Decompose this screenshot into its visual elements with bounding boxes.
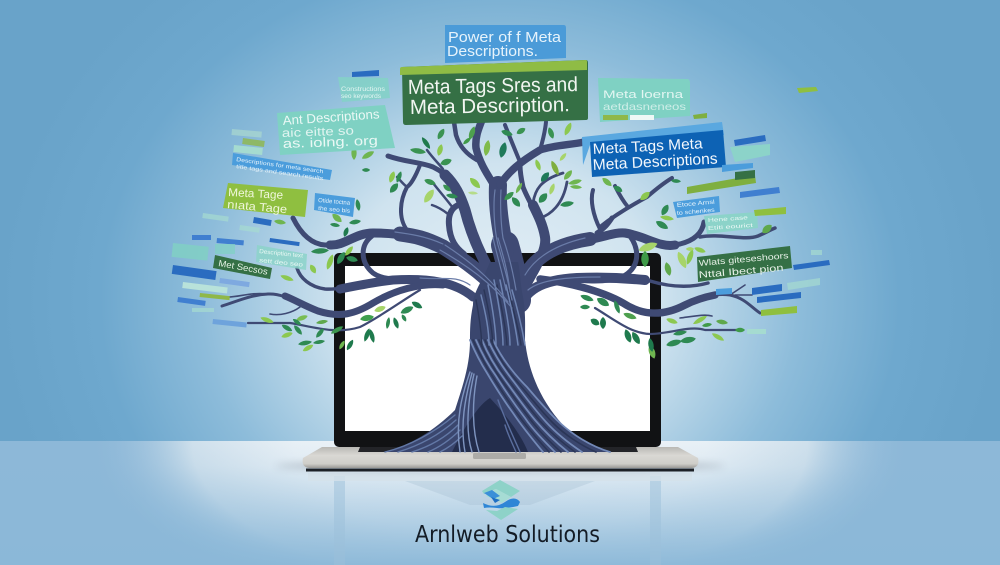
label: teal card right: Etiti eourict	[708, 223, 754, 232]
label: small blue card left: Otide toctna	[318, 198, 351, 207]
label: dark green right card	[697, 246, 792, 282]
right branches	[517, 165, 775, 334]
laptop base	[303, 447, 698, 472]
label: teal left card: as. iolng. org	[283, 133, 378, 151]
left upper limb	[388, 156, 490, 272]
label: blue strip left	[232, 153, 332, 182]
left middle leaf cluster	[274, 146, 403, 283]
label: teal card left middle: Description text	[259, 249, 304, 260]
label: Power of Meta Descriptions: Descriptions.	[447, 43, 538, 60]
right middle leaf cluster	[601, 176, 774, 277]
left branches	[222, 150, 517, 330]
label: Power of Meta Descriptions: Power of f Meta	[448, 29, 562, 46]
label: Meta Tags lime card	[223, 183, 308, 217]
label: Meta Tags and Meta Description: Meta Tags Sres and	[408, 73, 578, 99]
label: Meta Sections dark green: Met Secsos	[218, 258, 269, 277]
label: dark green right card: Wlats giteseshoors	[698, 250, 789, 268]
label: Meta Tags Meta Descriptions	[582, 122, 726, 177]
label: Meta Sections dark green	[213, 255, 272, 279]
right upper limb	[520, 165, 545, 300]
label: Meta Tags lime card: nıata Tage	[227, 199, 288, 216]
upper canopy leaves	[410, 122, 582, 209]
label: teal card right	[704, 212, 758, 234]
centre limb and crown	[454, 120, 584, 300]
label: teal card left middle	[256, 245, 307, 270]
company name: Arnlweb Solutions	[415, 522, 600, 548]
small tags right	[687, 87, 830, 334]
label: dark green right card: Nttal Ibect pion	[698, 263, 784, 281]
label: small teal card top left: seo keywords	[341, 94, 381, 100]
label: teal top right card	[598, 78, 690, 122]
label: small blue card left: the seo bis	[318, 206, 350, 215]
laptop	[303, 253, 698, 472]
small pale tags left	[172, 129, 300, 328]
label: teal top right card: Meta loerna	[603, 89, 684, 101]
label: Meta Tags Meta Descriptions: Meta Tags Meta	[592, 135, 704, 158]
label: Meta Tags lime card: Meta Tage	[228, 187, 283, 202]
label: small teal card top left	[338, 70, 390, 102]
right lower leaf cluster	[580, 293, 745, 360]
trunk shadow core	[452, 398, 528, 452]
label: teal left card: aic eitte so	[282, 123, 354, 140]
reflective floor	[0, 441, 1000, 565]
label: Meta Tags and Meta Description	[400, 60, 588, 125]
label: small blue card left	[314, 193, 355, 217]
label: Meta Tags and Meta Description: Meta Description.	[410, 93, 570, 119]
bark highlights on limbs	[493, 190, 516, 300]
label: small blue card right: to schenkes	[677, 208, 715, 217]
logo	[415, 480, 600, 548]
twisted trunk	[383, 190, 612, 452]
label: teal card left middle: sett deo seo	[259, 258, 304, 269]
leaves	[260, 122, 774, 360]
left lower leaf cluster	[260, 300, 424, 353]
laptop white display	[345, 266, 650, 431]
floating label cards	[172, 25, 830, 334]
label: small teal card top left: Constructions	[341, 87, 385, 93]
label: blue strip left: Descriptions for meta search	[236, 157, 324, 175]
label: blue strip left: title tags and search results	[236, 164, 324, 182]
label: teal top right card: aetdasneneos	[603, 101, 686, 113]
label: Meta Tags Meta Descriptions: Meta Descriptions	[592, 150, 718, 174]
label: teal left card: Ant Descriptions	[282, 106, 380, 128]
label: teal left card	[277, 105, 395, 155]
background	[0, 0, 1000, 441]
label: small blue card right	[673, 196, 720, 218]
label: small blue card right: Etoce Arnsl	[677, 200, 715, 209]
logo mark	[482, 480, 520, 520]
label: teal card right: Hene case	[708, 215, 748, 224]
laptop screen bezel	[334, 253, 661, 447]
tree	[222, 120, 775, 452]
label: Power of Meta Descriptions	[445, 25, 566, 63]
